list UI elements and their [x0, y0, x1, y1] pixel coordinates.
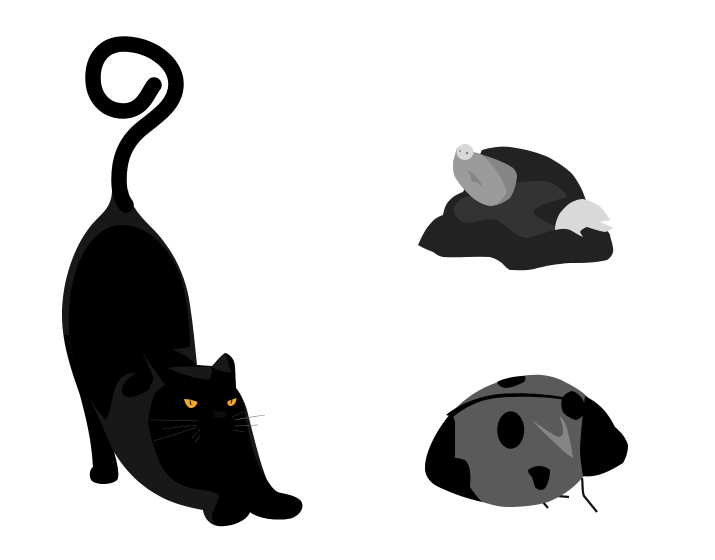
- ladybug shell line: [446, 393, 563, 417]
- mole paw: [555, 199, 613, 237]
- cat ear highlight: [212, 353, 232, 373]
- ladybug left spot: [425, 412, 482, 502]
- ladybug legs: [542, 478, 597, 512]
- ladybug lower spot: [528, 466, 550, 490]
- cat back shadow: [69, 225, 197, 419]
- mole snout highlight: [453, 148, 507, 206]
- ladybug head: [580, 396, 628, 476]
- cat body outline: [62, 190, 302, 526]
- cat back leg: [64, 335, 118, 484]
- ladybug top spot: [497, 376, 525, 388]
- cat head and front: [148, 353, 302, 526]
- icon: black cat stretching: [62, 44, 302, 526]
- cat forehead band: [167, 366, 212, 380]
- mole nose: [456, 144, 474, 160]
- mole body and soil mound: [418, 147, 613, 270]
- cat right eye: [227, 398, 236, 406]
- cat whiskers: [150, 412, 265, 442]
- icon: mole emerging from earth: [418, 144, 613, 270]
- soil highlight: [454, 181, 567, 238]
- cat tail: [93, 44, 176, 205]
- mole nostrils: [459, 150, 468, 154]
- mole snout crease: [468, 170, 483, 188]
- ladybug shoulder spot: [561, 391, 585, 420]
- cat left eye: [184, 399, 198, 408]
- cat nose: [213, 411, 226, 418]
- mole snout: [453, 148, 517, 206]
- ladybug shell: [425, 375, 590, 507]
- icon: ladybug: [425, 375, 628, 512]
- ladybug centre spot: [497, 411, 524, 449]
- ladybug shell highlight: [532, 415, 573, 458]
